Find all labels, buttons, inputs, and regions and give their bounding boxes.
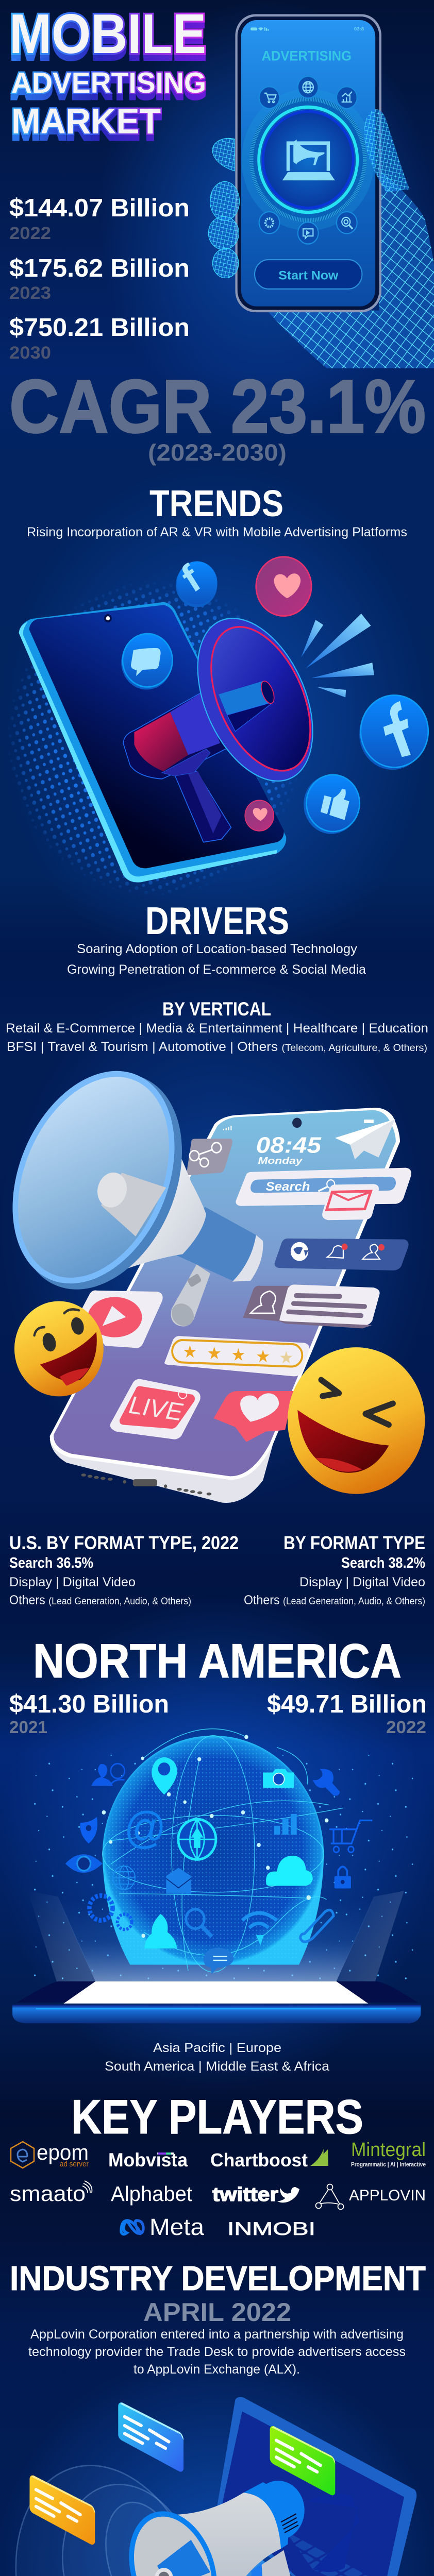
drivers text: Soaring Adoption of Location-based Technology	[77, 942, 358, 956]
development text: technology provider the Trade Desk to provide advertisers access	[28, 2345, 406, 2359]
play card	[80, 1291, 163, 1348]
rating card	[164, 1336, 309, 1376]
logo: InMobi: INMOBI	[227, 2219, 315, 2239]
start now button	[255, 260, 362, 289]
logo: twitter: twitter	[212, 2184, 278, 2206]
sound waves	[0, 2437, 238, 2576]
illustration: phone, megaphone and emojis	[0, 1042, 425, 1503]
illustration: wireframe hand holding phone	[208, 14, 434, 368]
market size values	[9, 194, 190, 363]
U.S. by format type: U.S. BY FORMAT TYPE, 2022	[9, 1532, 239, 1553]
glow nodes	[102, 1735, 328, 1958]
market size values: $175.62 Billion	[9, 255, 190, 282]
development text	[28, 2327, 406, 2377]
illustration: tablet and megaphone	[0, 556, 428, 907]
start now button: Start Now	[278, 268, 339, 282]
search bar: Search	[266, 1179, 310, 1193]
title: ADVERTISING	[11, 66, 206, 99]
title: MARKET	[11, 101, 161, 141]
logo: epom	[11, 2140, 89, 2168]
clock text: 08:45	[256, 1132, 322, 1158]
logo: Meta: Meta	[149, 2214, 205, 2240]
icon: heart coin	[256, 557, 311, 616]
market size values: $750.21 Billion	[9, 314, 190, 342]
icon: laptop with megaphone	[282, 140, 335, 180]
phone body	[235, 14, 381, 312]
live card: LIVE	[127, 1391, 185, 1426]
status bar	[251, 26, 364, 31]
icon glyphs	[264, 81, 353, 239]
global by format type	[244, 1532, 425, 1607]
key players heading: KEY PLAYERS	[71, 2090, 363, 2144]
logo: epom: epom	[37, 2140, 89, 2164]
icon: paper plane	[335, 1119, 395, 1160]
clock text	[256, 1132, 322, 1166]
north america heading: NORTH AMERICA	[33, 1634, 402, 1688]
logo: AppLovin: APPLOVIN	[349, 2187, 426, 2204]
mail card	[322, 1184, 379, 1220]
development text: to AppLovin Exchange (ALX).	[133, 2362, 300, 2377]
megaphone	[116, 2481, 305, 2576]
trends text: Rising Incorporation of AR & VR with Mobile Advertising Platforms	[27, 525, 407, 539]
U.S. by format type: Search 36.5%	[9, 1555, 93, 1571]
title: MOBILE	[9, 3, 206, 65]
market size values: 2023	[9, 283, 51, 303]
global by format type: Display | Digital Video	[299, 1575, 425, 1589]
laptop	[89, 2397, 416, 2576]
north america values: 2021	[9, 1718, 47, 1737]
trends heading: TRENDS	[149, 483, 283, 524]
rating card: ★	[207, 1344, 222, 1363]
status bar: 03:8	[354, 26, 364, 31]
phone heading: ADVERTISING	[261, 49, 352, 64]
icon: wireframe hand palm	[267, 168, 434, 368]
north america values: $49.71 Billion	[267, 1690, 427, 1718]
date: APRIL 2022	[143, 2298, 291, 2327]
network arcs	[103, 1729, 343, 1972]
logo: twitter	[212, 2184, 299, 2206]
live card	[110, 1379, 201, 1439]
market size values: $144.07 Billion	[9, 194, 190, 222]
light beams	[28, 1891, 404, 2004]
CAGR: (2023-2030)	[148, 439, 287, 466]
megaphone	[123, 598, 336, 842]
north america values: 2022	[386, 1718, 426, 1737]
icon: share card	[187, 1139, 232, 1175]
logo: Chartboost: Chartboost	[210, 2149, 308, 2171]
rating card: ★	[231, 1345, 245, 1364]
notification bar	[275, 1239, 409, 1270]
logo: Mintegral: Programmatic | AI | Interactive	[351, 2162, 426, 2168]
by vertical heading: BY VERTICAL	[162, 998, 271, 1020]
logo: smaato: smaato	[10, 2181, 86, 2206]
tablet	[19, 602, 286, 883]
clock text: Monday	[258, 1156, 303, 1166]
icon: wireframe thumb	[364, 109, 410, 192]
icon: chat bubble	[121, 634, 173, 690]
card: yellow	[29, 2476, 95, 2545]
megaphone shadow on screen	[307, 2494, 359, 2572]
other regions: Asia Pacific | Europe	[153, 2041, 281, 2055]
development text: AppLovin Corporation entered into a partnership with advertising	[30, 2327, 404, 2342]
market size values: 2030	[9, 343, 51, 363]
emoji: laughing left	[14, 1301, 104, 1396]
title: MARKET	[11, 101, 161, 141]
by vertical list: BFSI | Travel & Tourism | Automotive | Others (Telecom, Agriculture, & Others)	[7, 1040, 427, 1054]
drivers text: Growing Penetration of E-commerce & Social Media	[67, 962, 366, 977]
emoji: laughing right	[288, 1347, 425, 1494]
logo: Mintegral: Mintegral	[351, 2139, 426, 2161]
icon: facebook small: f	[174, 556, 208, 601]
global by format type: Others (Lead Generation, Audio, & Others)	[244, 1593, 425, 1607]
profile card	[243, 1284, 380, 1328]
title: MOBILE	[9, 3, 206, 65]
phone base	[12, 1981, 421, 2023]
drivers text	[67, 942, 366, 977]
logo: Alphabet: Alphabet	[111, 2182, 193, 2206]
globe sphere	[103, 1736, 324, 1965]
by vertical list	[6, 1021, 428, 1054]
north america values	[9, 1690, 427, 1737]
card: blue	[118, 2402, 183, 2472]
icon: facebook large	[359, 695, 428, 770]
U.S. by format type: Display | Digital Video	[9, 1575, 136, 1589]
logo: Meta	[121, 2214, 205, 2240]
icons around globe: @	[124, 1803, 166, 1853]
illustration: laptop and megaphone	[0, 2397, 416, 2576]
heart card	[214, 1391, 293, 1442]
icon: small heart	[245, 800, 274, 831]
icon: wireframe fingers	[208, 138, 240, 278]
other regions: South America | Middle East & Africa	[105, 2059, 329, 2074]
icon: thumbs up	[304, 775, 360, 834]
search bar	[236, 1168, 411, 1206]
phone body	[50, 1108, 400, 1503]
small app icons	[259, 76, 357, 244]
icons around globe	[65, 1757, 372, 1974]
U.S. by format type: Others (Lead Generation, Audio, & Others)	[9, 1593, 191, 1607]
north america values: $41.30 Billion	[9, 1690, 169, 1718]
rating card: ★	[256, 1347, 270, 1366]
icon: facebook small	[174, 556, 218, 607]
illustration: digital globe over phone	[12, 1729, 421, 2023]
icon: sound rays	[301, 614, 374, 697]
logo: epom: ad server	[60, 2160, 89, 2168]
market size values: 2022	[9, 224, 51, 243]
U.S. by format type	[9, 1532, 239, 1607]
drivers heading: DRIVERS	[145, 899, 289, 942]
by vertical list: Retail & E-Commerce | Media & Entertainment | Healthcare | Education	[6, 1021, 428, 1036]
other regions	[105, 2041, 329, 2074]
rating card: ★	[182, 1342, 197, 1361]
logo: AppLovin	[315, 2184, 426, 2209]
rating card: ★	[279, 1348, 293, 1367]
card: green	[270, 2426, 335, 2495]
title: ADVERTISING	[11, 66, 206, 99]
title	[9, 3, 206, 141]
megaphone	[0, 1042, 263, 1331]
logo: Mobvista: Mobvista	[108, 2149, 188, 2171]
